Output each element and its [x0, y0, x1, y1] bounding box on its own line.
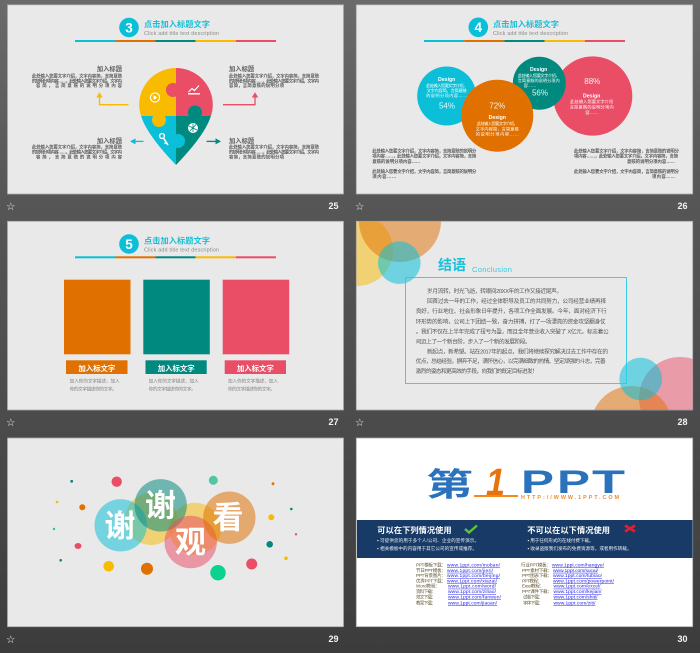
text box: conclusion body: 。我们不仅在上半年完成了扭亏为盈，而且全年营业收入突破了 X亿元，标志着公: [416, 328, 609, 336]
text block: bottom left: 此处输入您要文字介绍，文字内容简，言简意赅: [32, 144, 123, 151]
text block: bottom left: [32, 136, 123, 160]
bubble: 56%: 56%: [532, 88, 548, 98]
bubble: 88%: Design: [583, 94, 600, 100]
not allowed column: ▪ 收录盗版我们发布的免费资源等，或者用作转载。: [528, 545, 632, 552]
banner: usage rules: [357, 520, 692, 558]
links: left column: 资料下载：: [416, 588, 436, 595]
links: right column: www.1ppt.com/sucai/: [553, 568, 599, 574]
footer: slide markers and numbers: ☆: [355, 201, 364, 213]
heading: slide 26 title: Click add title text description: [493, 31, 568, 37]
text block: bottom left: 的说明分项内容……，此处输入您要文字介绍，文字内: [32, 149, 123, 156]
links: left column: www.1ppt.com/fanwen/: [448, 594, 502, 600]
icon: key: [160, 134, 168, 145]
card: orange: [64, 280, 130, 392]
heading: slide 27 title: 5: [125, 237, 133, 252]
card: pink: 你的文字描述你的文字。: [228, 386, 275, 392]
not allowed column: [527, 525, 635, 552]
logo: 1PPT: T: [592, 464, 626, 500]
heading: slide 26 title: 4: [475, 20, 483, 35]
text block: top left: 的说明分项内容……，此处输入您要文字介绍，文字内: [32, 77, 123, 84]
allowed column: ▪ 可提供您的用于多个人/公司、企业的宣传演示。: [377, 537, 479, 544]
text block: right note: 项内容……，此处输入您要文字介绍，文字内容简，言简: [574, 153, 679, 160]
bubble: 54%: 54%: [439, 102, 455, 110]
text block: bottom left: 容简，言简意赅的说明分项内容: [36, 153, 123, 160]
text block: top right: 此处输入您要文字介绍，文字内容简，言简意赅: [229, 72, 320, 79]
footer: slide markers and numbers: 29: [328, 634, 339, 644]
links: right column: www.1ppt.com/excel/: [554, 584, 601, 590]
bubble: 56%: [513, 57, 566, 110]
text block: right note: 项内容……: [652, 173, 675, 180]
text box: conclusion body: 司迈上了一个新台阶，步入了一个新的发展阶段。: [416, 338, 531, 346]
chart: overlapping circles with thanks text: [94, 479, 256, 568]
logo: 1PPT: 1: [486, 462, 505, 504]
heading: slide 25 title: Click add title text description: [144, 31, 219, 37]
text block: bottom right: 加入标题: [229, 136, 255, 145]
text block: bottom left: 加入标题: [97, 136, 123, 145]
bubble: 72%: Design: [489, 115, 506, 121]
chart: overlapping circles with thanks text: 看: [212, 500, 244, 536]
links: right column: www.1ppt.com/ziti/: [554, 600, 596, 606]
text block: right note: [574, 148, 680, 180]
footer: slide markers and numbers: ☆: [6, 201, 15, 213]
links: left column: 节日PPT模板：: [416, 567, 446, 574]
text block: left note: 项内容……: [372, 173, 396, 180]
links: left column: PPT背景图片：: [416, 572, 446, 579]
text box: conclusion body: 岁月流转，时光飞逝，转眼间20XX年的工作又接近尾声。: [427, 287, 562, 295]
chart: overlapping circles with thanks text: 观: [175, 525, 206, 560]
text box: conclusion body: [406, 278, 626, 384]
text block: bottom right: [229, 136, 320, 160]
links: right column: www.1ppt.com/tubiao/: [553, 573, 603, 579]
links: left column: www.1ppt.com/word/: [448, 584, 497, 590]
arrow: yellow up-left: [96, 92, 128, 105]
links: right column: PPT教程：: [522, 577, 542, 584]
links: right column: www.1ppt.com/shiti/: [554, 594, 598, 600]
panel: slide 28 conclusion: [356, 220, 694, 410]
chart: overlapping circles with thanks text: 谢: [104, 509, 136, 544]
card: orange: 加入标文字: [78, 364, 115, 373]
text block: top right: 加入标题: [229, 64, 255, 73]
links: right column: 行业PPT模板：: [521, 562, 551, 568]
links: right column: www.1ppt.com/kejian/: [554, 589, 602, 595]
heading: slide 27 title: Click add title text description: [144, 247, 219, 253]
links: left column: www.1ppt.com/beijing/: [447, 573, 501, 579]
bubble: 72%: [461, 80, 533, 152]
links: left column: 范文下载：: [416, 593, 436, 600]
text box: conclusion body: 环形势的影响，公司上下团结一致，奋力拼搏，打了一场漂亮的资金攻坚翻身仗: [416, 318, 606, 326]
footer: slide markers and numbers: 28: [678, 417, 688, 427]
text block: top left: 此处输入您要文字介绍，文字内容简，言简意赅: [32, 72, 123, 79]
icon: globe: [188, 123, 198, 133]
heading: slide 27 title: 点击加入标题文字: [144, 236, 210, 246]
allowed column: ▪ 相关模板中的内容用于其它公司的宣传或推荐。: [377, 545, 477, 552]
links: left column: 教案下载：: [416, 599, 436, 606]
text box: conclusion body: 回首过去一年的工作，经过全体职导及员工的共同努力，公司经营业绩再择: [427, 297, 606, 305]
footer: slide markers and numbers: ☆: [355, 417, 364, 429]
icon: chart: [188, 86, 200, 94]
card: teal: 加入你的文字描述，加入: [149, 378, 199, 384]
card: pink: 加入标文字: [237, 364, 274, 373]
bubble: 54%: 此处输入您要文字介绍，: [426, 82, 467, 89]
links: right column: www.1ppt.com/powerpoint/: [553, 578, 615, 584]
links: right column: PPT课件下载：: [522, 588, 552, 595]
text block: top left: 加入标题: [97, 64, 123, 73]
text box: conclusion body: 新起点，新希望。站在2017年的起点，我们将继续探究解决过去工作中存在的: [427, 347, 608, 355]
decoration: scattered dots: [53, 476, 297, 580]
text block: bottom right: 的说明分项内容……，此处输入您要文字介绍，文字内: [229, 149, 320, 156]
card: teal: 你的文字描述你的文字。: [149, 386, 196, 392]
links: right column: [521, 562, 615, 606]
heading: slide 25 title: 点击加入标题文字: [144, 19, 210, 29]
links: left column: Word教程：: [416, 583, 440, 590]
links: right column: Excel教程：: [522, 583, 544, 590]
icon: play: [150, 93, 160, 102]
links: left column: www.1ppt.com/jieri/: [447, 568, 494, 574]
bubble: 72%: 72%: [489, 102, 505, 110]
links: right column: PPT素材下载：: [522, 567, 552, 574]
heading: conclusion: 结语: [438, 257, 466, 273]
text block: top right: 的说明分项内容……，此处输入您要文字介绍，文字内: [229, 77, 320, 84]
allowed column: [377, 525, 479, 552]
heading: slide 25 title: [75, 18, 276, 42]
panel: slide 27 three cards: [8, 221, 344, 410]
link table: [416, 562, 615, 606]
heading: slide 25 title: 3: [125, 20, 133, 35]
panel: slide 25 puzzle pin: [8, 5, 344, 194]
bubble: 88%: 88%: [584, 77, 600, 86]
heading: slide 26 title: [424, 18, 625, 42]
bubble: 54%: Design: [438, 77, 455, 83]
logo: 1PPT: 第: [426, 466, 473, 502]
bubble: 56%: 此处输入您要文字介绍，: [518, 72, 560, 79]
text block: top left: [32, 64, 123, 89]
bubble: 54%: 文字内容简，言简意赅: [427, 87, 467, 94]
links: left column: www.1ppt.com/ziliao/: [448, 589, 497, 595]
links: right column: PPT图表下载：: [522, 572, 552, 579]
bubble: 72%: 的说明分项内容……: [476, 130, 519, 138]
links: right column: 字体下载：: [523, 599, 543, 606]
links: right column: www.1ppt.com/hangye/: [552, 562, 605, 568]
links: left column: 优秀PPT下载：: [416, 577, 446, 584]
text box: conclusion body: 良好，行业地位、社会形象日年提升，各项工作全面发展。今年，面对经济下行: [416, 307, 607, 315]
bubble: 56%: Design: [530, 67, 547, 73]
bubble: 88%: [553, 56, 632, 136]
decoration: top left circles: [356, 222, 441, 286]
text block: bottom right: 此处输入您要文字介绍，文字内容简，言简意赅: [229, 144, 320, 151]
text block: right note: 意赅的说明分项内容……: [627, 158, 675, 165]
bubble: 88%: 言简意赅的说明分项内: [570, 103, 614, 110]
decoration: bottom right circles: [594, 357, 692, 410]
heading: slide 26 title: 点击加入标题文字: [493, 19, 559, 29]
text block: left note: [372, 148, 477, 180]
card: teal: 加入标文字: [158, 364, 195, 373]
text block: right note: 此处输入您要文字介绍，文字内容简，言简意赅的说明分: [574, 168, 680, 175]
links: left column: www.1ppt.com/jiaoan/: [448, 600, 498, 606]
bubble: 54%: 的说明分项内容……: [426, 92, 467, 99]
chart: overlapping circles with thanks text: 谢: [145, 488, 176, 524]
logo: 1PPT: P: [521, 464, 554, 500]
logo: 1PPT: P: [557, 464, 590, 500]
logo: 1PPT: [426, 462, 626, 504]
links: left column: [416, 562, 502, 606]
links: left column: www.1ppt.com/xiazai/: [447, 578, 498, 584]
text block: left note: 意赅的说明分项内容……: [372, 158, 420, 165]
arrow: pink up-right: [223, 92, 258, 105]
not allowed column: ▪ 用于任何形式的在线付费下载。: [528, 537, 594, 544]
card: pink: [223, 280, 289, 392]
panel: slide 30 brand page: [356, 438, 693, 627]
arrow: cyan left: [130, 138, 144, 144]
arrow: teal right: [206, 138, 221, 144]
heading: conclusion: Conclusion: [472, 265, 512, 274]
footer: slide markers and numbers: ☆: [6, 634, 15, 646]
panel: slide 29 thank you: [8, 438, 344, 627]
links: left column: www.1ppt.com/moban/: [447, 562, 501, 568]
text block: top right: 容简，言简意赅的说明分项: [229, 82, 285, 89]
bubble: 56%: 言简意赅的说明分项内: [518, 77, 560, 84]
footer: slide markers and numbers: 25: [328, 201, 339, 211]
text box: conclusion body: 优点，总结经验，摒弃不足，满怀信心，以完满细致的热情、坚定顽强的斗志，完善: [416, 357, 606, 365]
card: pink: 加入你的文字描述，加入: [228, 378, 278, 384]
logo: 1PPT: HTTP://WWW.1PPT.COM: [521, 495, 620, 501]
heading: conclusion: [438, 257, 512, 274]
text block: right note: 此处输入您要文字介绍，文字内容简，言简意赅的说明分: [574, 148, 680, 154]
footer: slide markers and numbers: 27: [328, 417, 339, 427]
card: orange: 加入你的文字描述，加入: [70, 378, 120, 384]
text box: conclusion body: 激烈的姿态和更高效的手段，向我们的既定目标进发！: [416, 367, 538, 375]
text block: bottom right: 容简，言简意赅的说明分项: [229, 153, 285, 160]
bubble: 72%: 此处输入您要文字介绍，: [477, 120, 518, 127]
text block: left note: 此处输入您要文字介绍，文字内容简，言简意赅的说明分: [372, 168, 477, 175]
bubble: 56%: 容……: [524, 82, 536, 89]
links: right column: 试卷下载：: [523, 593, 543, 600]
text block: top right: [229, 64, 320, 89]
links: left column: PPT模板下载：: [416, 562, 446, 568]
footer: slide markers and numbers: ☆: [6, 417, 15, 429]
bubble: 88%: 此处输入您要文字介绍: [570, 98, 613, 105]
bubble: 88%: 容……: [585, 109, 598, 116]
heading: slide 27 title: [75, 234, 276, 258]
bubble: 54%: [417, 66, 476, 126]
text block: left note: 此处输入您要文字介绍，文字内容简，言简意赅的说明分: [372, 148, 477, 154]
not allowed column: 不可以在以下情况使用: [527, 525, 610, 535]
footer: slide markers and numbers: 30: [678, 634, 688, 644]
text block: top left: 容简，言简意赅的说明分项内容: [36, 82, 123, 89]
card: orange: 你的文字描述你的文字。: [70, 386, 117, 392]
footer: slide markers and numbers: [6, 201, 688, 646]
chart: puzzle pin: [139, 68, 213, 165]
text block: left note: 项内容……，此处输入您要文字介绍，文字内容简，言简: [372, 153, 477, 160]
card: teal: [143, 280, 210, 392]
panel: slide 26 bubbles: [356, 5, 693, 194]
bubble: 72%: 文字内容简，言简意赅: [476, 125, 519, 132]
footer: slide markers and numbers: 26: [678, 201, 688, 211]
allowed column: 可以在下列情况使用: [377, 525, 452, 535]
